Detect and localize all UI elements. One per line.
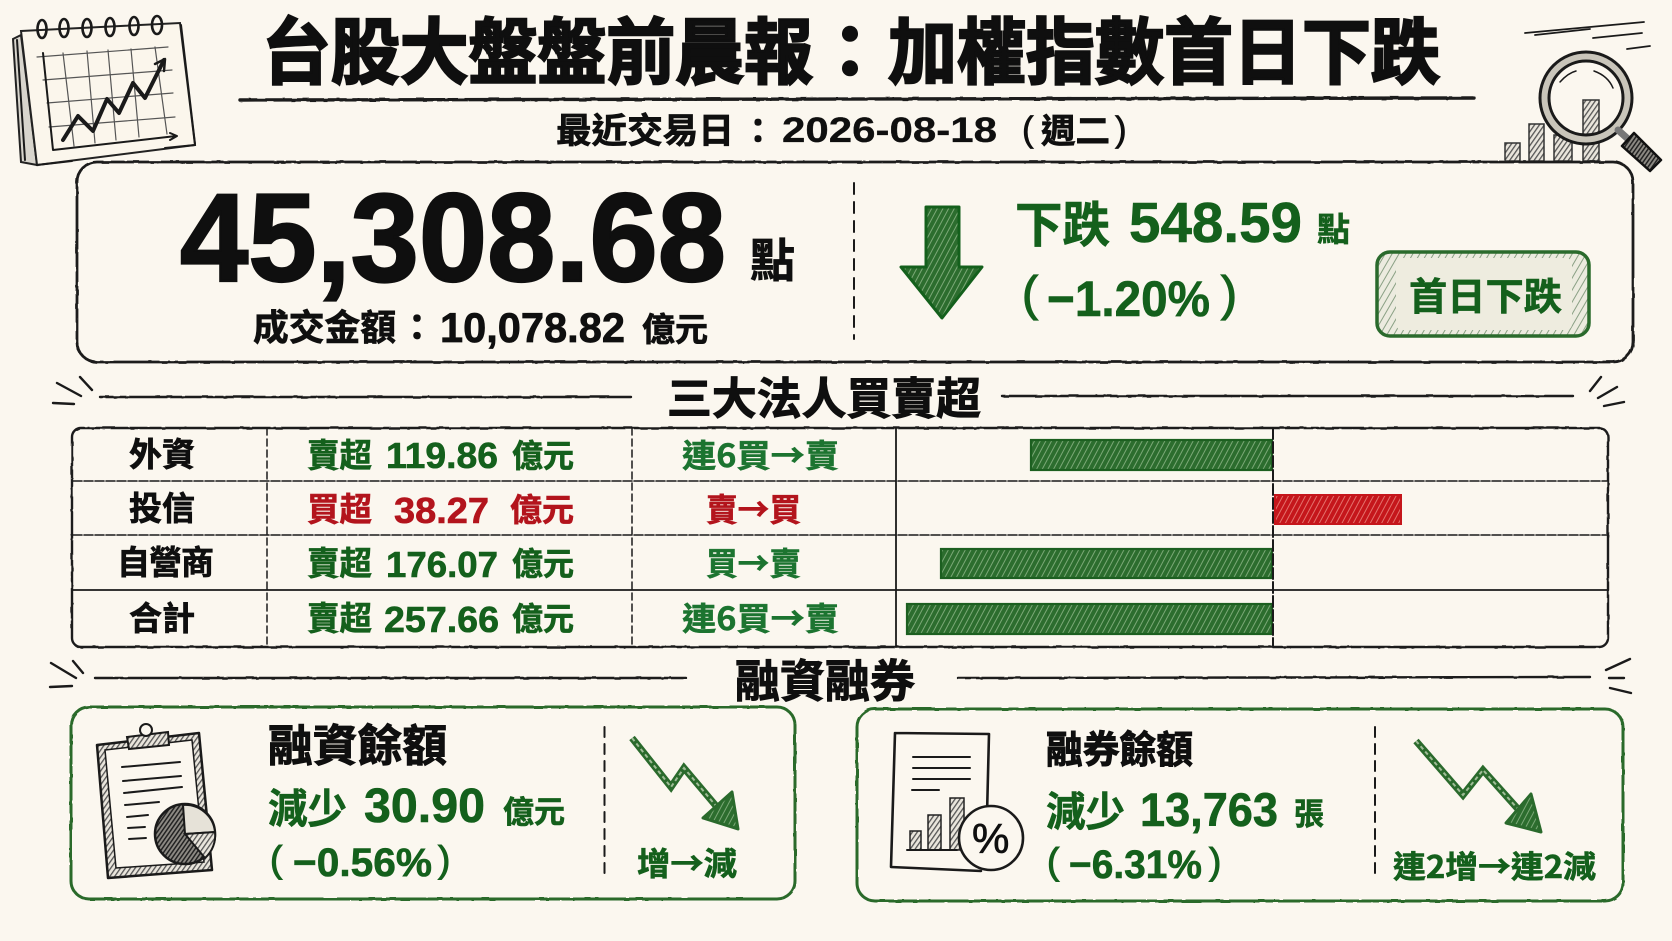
icon: document with chart and percent	[891, 733, 1023, 871]
change value: 548.59	[1129, 191, 1302, 255]
margin change value: 減少	[268, 775, 347, 835]
icon: magnifying glass over bar chart	[1505, 52, 1661, 171]
panel: margin balance	[71, 707, 795, 899]
icon: falling arrow	[1416, 741, 1541, 832]
trend label: 連2增→連2減	[1393, 842, 1596, 887]
divider	[1374, 727, 1376, 878]
row: foreign investors	[129, 428, 1272, 477]
section heading: margin and short: 融資融券	[735, 645, 915, 710]
sparkle strokes: top right	[1525, 22, 1650, 49]
short change value: 減少	[1046, 778, 1125, 838]
divider	[604, 727, 606, 879]
short change percent: (	[1047, 841, 1060, 882]
change value	[1015, 186, 1350, 257]
icon: document with chart and percent: %	[972, 815, 1009, 862]
row: dealers	[117, 536, 1272, 585]
date line: 週二	[1041, 104, 1110, 153]
margin change value	[268, 775, 565, 835]
panel: index summary	[77, 162, 1633, 362]
section heading: margin and short	[50, 645, 1631, 710]
divider	[853, 183, 855, 339]
change percent: )	[1221, 268, 1237, 321]
row: dealers: 賣超	[307, 537, 372, 585]
row: foreign investors: 外資	[129, 428, 195, 476]
date line: 最近交易日	[556, 103, 734, 154]
trend label: 增→減	[637, 839, 737, 885]
date line: ：	[741, 104, 775, 153]
section heading: institutional investors: 三大法人買賣超	[667, 363, 981, 427]
turnover: 成交金額	[253, 299, 396, 351]
margin change percent: )	[438, 839, 450, 880]
row: foreign investors: 119.86	[386, 435, 498, 476]
row: total: 賣超	[307, 592, 372, 640]
row: dealers: 買→賣	[706, 539, 801, 585]
row: foreign investors: 連6買→賣	[682, 431, 839, 477]
turnover: 億元	[642, 303, 708, 351]
row: investment trust: 38.27	[394, 490, 489, 531]
change value: 下跌	[1015, 186, 1110, 257]
badge: 首日下跌	[1409, 266, 1562, 321]
index unit: 點	[750, 225, 795, 291]
change percent: (	[1022, 268, 1038, 321]
row: foreign investors: 億元	[512, 431, 574, 477]
row: foreign investors: 賣超	[307, 429, 372, 477]
row: total: 合計	[129, 592, 195, 640]
row: total: 億元	[512, 594, 574, 640]
row: investment trust: 億元	[510, 485, 574, 531]
badge	[1377, 252, 1589, 336]
turnover: ：	[399, 299, 435, 351]
icon: down arrow	[901, 207, 982, 318]
row: investment trust: 賣→買	[706, 485, 801, 531]
row: dealers: 億元	[512, 539, 574, 585]
panel: institutional table	[72, 428, 1608, 647]
panel: short balance	[857, 709, 1623, 901]
change percent: −1.20%	[1047, 271, 1210, 327]
turnover: 10,078.82	[440, 304, 625, 351]
date line: )	[1115, 110, 1127, 149]
date line	[556, 103, 1127, 154]
short change value	[1046, 778, 1324, 838]
margin change value: 億元	[503, 787, 565, 832]
index value: 45,308.68	[180, 169, 726, 308]
margin change value: 30.90	[364, 780, 485, 833]
short change value: 張	[1294, 789, 1324, 834]
heading: 融資餘額	[268, 710, 447, 774]
icon: calendar with rising chart	[13, 16, 195, 165]
row: investment trust: 投信	[129, 482, 195, 530]
short change percent: −6.31%	[1069, 843, 1202, 887]
row: dealers: 176.07	[386, 544, 498, 585]
row: investment trust: 買超	[307, 483, 372, 531]
turnover	[253, 299, 708, 351]
date line: (	[1022, 110, 1034, 149]
margin change percent: (	[270, 839, 283, 880]
change value: 點	[1317, 203, 1350, 251]
row: total: 連6買→賣	[682, 594, 839, 640]
row: investment trust	[129, 482, 1401, 531]
date line: 2026-08-18	[782, 111, 997, 150]
icon: falling arrow	[632, 738, 738, 829]
section heading: institutional investors	[53, 363, 1624, 427]
title	[262, 0, 1440, 99]
title underline	[240, 98, 1474, 100]
row: total: 257.66	[384, 599, 499, 640]
short change percent: )	[1209, 841, 1221, 882]
row: total	[129, 592, 1272, 640]
heading: 融券餘額	[1046, 719, 1193, 774]
icon: clipboard with pie chart	[97, 724, 215, 878]
row: dealers: 自營商	[117, 536, 214, 584]
short change value: 13,763	[1140, 783, 1278, 836]
margin change percent: −0.56%	[293, 841, 432, 885]
